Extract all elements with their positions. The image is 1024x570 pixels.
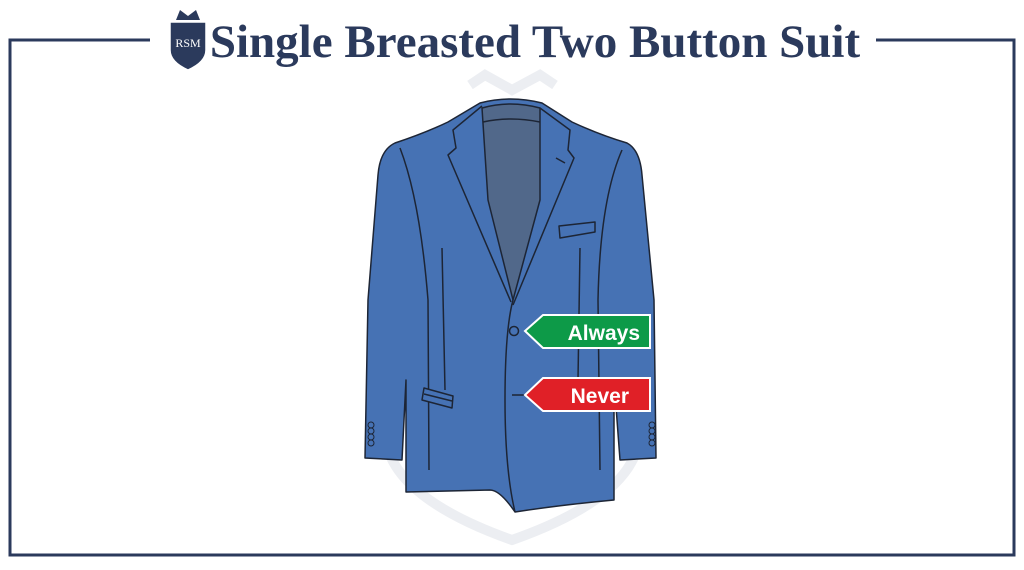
logo crest <box>170 10 206 70</box>
front edge <box>505 300 515 512</box>
hip pocket <box>422 388 453 408</box>
bottom button <box>512 394 525 396</box>
top button <box>510 326 518 336</box>
arrow: Always: Always <box>568 322 640 345</box>
arrow: Never <box>525 378 650 411</box>
watermark logo <box>385 75 640 540</box>
arrow: Never: Never <box>571 385 629 408</box>
jacket body <box>365 99 656 512</box>
lining <box>482 104 540 300</box>
arrow: Always <box>525 315 650 348</box>
chest pocket <box>559 222 595 238</box>
logo crest: RSM <box>175 36 201 50</box>
jacket <box>365 99 656 512</box>
cuff buttons <box>368 422 655 446</box>
seams <box>400 148 429 470</box>
lapels <box>448 106 511 302</box>
title: Single Breasted Two Button Suit <box>210 16 860 68</box>
